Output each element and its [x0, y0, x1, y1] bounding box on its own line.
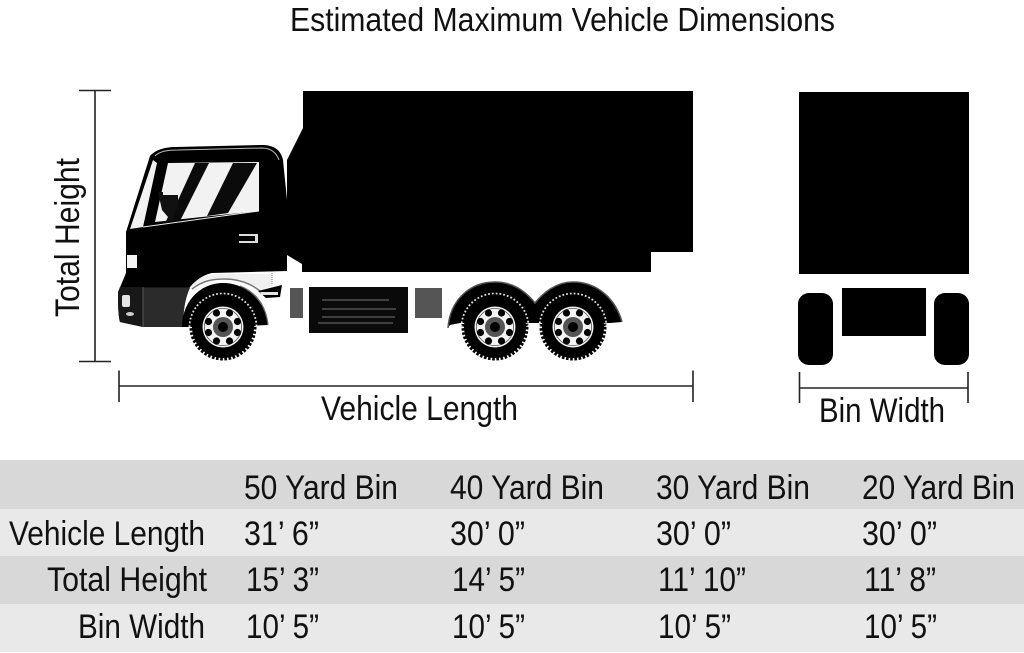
bin width row: 10’ 5”	[658, 608, 731, 646]
vehicle length row: Vehicle Length	[9, 515, 205, 553]
total height row	[47, 561, 936, 599]
rear wheels	[462, 294, 606, 359]
rear fenders	[448, 282, 622, 328]
table header row	[244, 469, 1015, 507]
table row backgrounds	[0, 460, 1024, 652]
cab roof highlight	[155, 148, 279, 160]
bin width row: 10’ 5”	[864, 608, 937, 646]
table header row: 30 Yard Bin	[656, 469, 810, 507]
title: Estimated Maximum Vehicle Dimensions	[290, 1, 835, 38]
left rear tire	[798, 293, 833, 365]
table header row: 40 Yard Bin	[450, 469, 604, 507]
window stripes	[168, 163, 257, 222]
bin width row: 10’ 5”	[246, 608, 319, 646]
bin width row: Bin Width	[78, 608, 205, 646]
bin width row: 10’ 5”	[452, 608, 525, 646]
total height label: Total Height	[49, 158, 87, 317]
truck side view illustration	[118, 91, 693, 359]
truck rear view illustration	[798, 92, 969, 365]
truck cab	[118, 145, 287, 359]
battery box	[415, 288, 442, 318]
vehicle length row	[9, 515, 937, 553]
bin width row	[78, 608, 937, 646]
total height row: 11’ 10”	[658, 561, 746, 599]
dimensions table	[0, 460, 1024, 652]
total height row: 14’ 5”	[452, 561, 525, 599]
total height row: Total Height	[47, 561, 207, 599]
cab step	[258, 285, 282, 298]
vehicle length row: 31’ 6”	[244, 515, 319, 553]
cab side glass	[130, 160, 157, 229]
vehicle length label: Vehicle Length	[321, 390, 518, 428]
bin, rear view	[799, 92, 969, 274]
bin body, side view	[287, 91, 693, 272]
cab door window	[155, 162, 259, 222]
bin width dimension bracket	[800, 372, 968, 403]
right rear tire	[934, 293, 969, 365]
headlight	[127, 255, 137, 268]
wheel arch highlight	[190, 274, 272, 290]
vehicle length row: 30’ 0”	[450, 515, 525, 553]
driver silhouette	[158, 192, 178, 221]
total height dimension bracket	[79, 90, 111, 362]
front fender	[182, 283, 268, 327]
table header row: 50 Yard Bin	[244, 469, 398, 507]
vehicle length row: 30’ 0”	[862, 515, 937, 553]
mudguard panel	[290, 288, 303, 318]
axle block	[842, 288, 926, 336]
total height row: 15’ 3”	[246, 561, 319, 599]
front wheel	[191, 295, 255, 359]
vehicle length row: 30’ 0”	[656, 515, 731, 553]
door handle	[239, 234, 258, 243]
total height row: 11’ 8”	[864, 561, 936, 599]
fuel tank	[309, 287, 408, 333]
bin width label: Bin Width	[819, 392, 945, 430]
vehicle length dimension bracket	[119, 370, 693, 402]
window sill line	[143, 211, 259, 227]
